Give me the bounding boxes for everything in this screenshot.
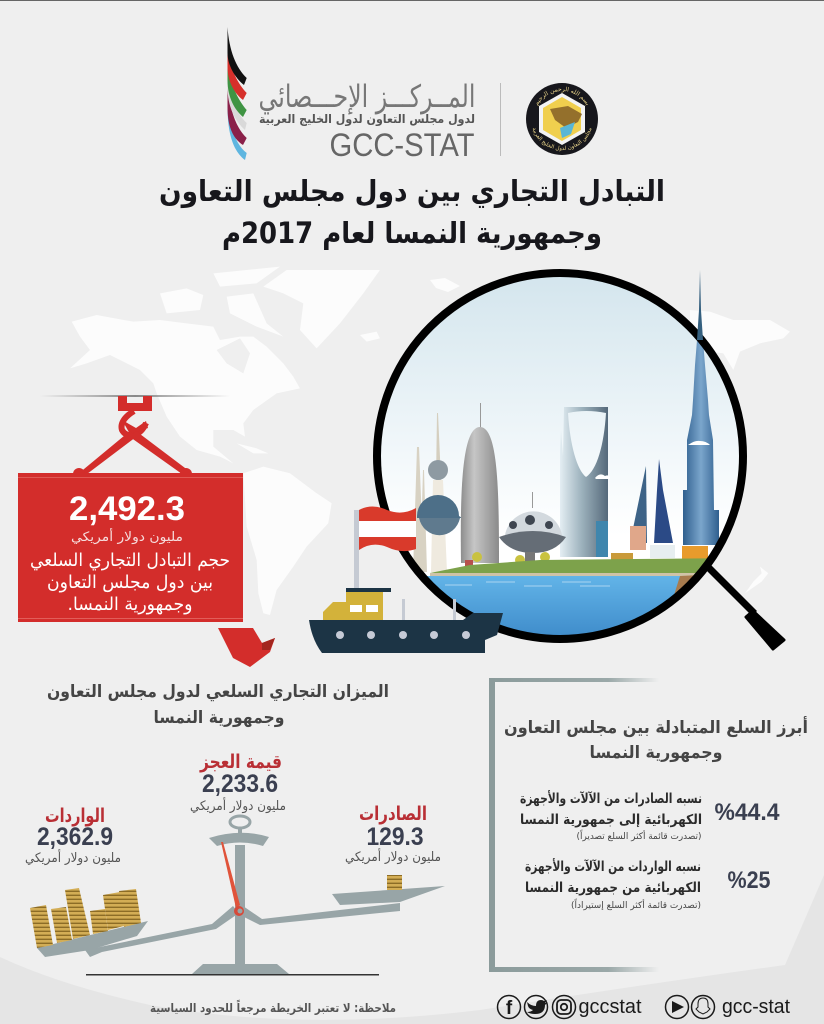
heading: trade balance: وجمهورية النمسا [154,708,284,728]
handle gcc-stat: gcc-stat [722,996,790,1018]
scale base [192,964,289,974]
panel bracket [489,678,659,972]
ship mast [402,599,405,621]
row: imports share: (تصدرت قائمة أكثر السلع إستيراداً) [571,898,701,911]
burj spire over ring [697,270,703,340]
sea [427,576,680,635]
tower: kingdom centre [560,407,608,557]
crane hook and cargo panel [18,395,243,622]
stat: exports: الصادرات [359,803,427,825]
icon: facebook [498,996,520,1019]
right pan [332,886,445,905]
waterfront [430,573,696,576]
handle gccstat: gccstat [578,996,642,1018]
scale beam right [238,903,400,925]
icon: snapchat [692,996,714,1018]
stat: deficit [190,751,286,814]
panel description: وجمهورية النمسا. [68,594,192,615]
row: exports share: %44.4 [714,799,780,826]
hanging ropes [78,431,193,474]
flag pole [354,510,359,588]
balance scale [30,816,445,976]
map: south america [243,467,332,615]
map: hudson bay [217,338,250,373]
flag [359,506,416,551]
row: exports share: الكهربائية إلى جمهورية النمسا [520,812,702,828]
panel heading [504,716,808,763]
wave highlights [445,582,610,586]
scale beam left [85,906,239,957]
row: imports share: %25 [728,867,770,894]
total value: 2,492.3 [69,490,185,528]
hook [118,396,152,435]
map: new zealand [745,567,768,593]
world map [70,267,790,615]
stat: deficit: 2,233.6 [202,770,278,798]
heading: trade balance: الميزان التجاري السلعي لدول مجلس التعاون [47,682,389,702]
map: caribbean [237,443,268,453]
panel heading: أبرز السلع المتبادلة بين مجلس التعاون [504,716,808,738]
panel description [30,550,230,615]
scale pivot [234,906,244,916]
ship windows [350,605,378,612]
social media handles [498,996,790,1019]
row: exports share [520,790,780,842]
heading: trade balance [47,682,389,728]
stat: imports: 2,362.9 [37,823,113,851]
map: greenland [263,270,380,348]
magnifier handle [703,562,784,649]
stat: imports: مليون دولار أمريكي [25,849,121,866]
stat: exports: 129.3 [366,823,424,851]
icon: facebook: f [506,998,513,1019]
scale pole [235,845,245,965]
row: imports share: نسبه الواردات من الآلآت والأجهزة [525,858,701,875]
panel description: حجم التبادل التجاري السلعي [30,550,230,571]
emblem [526,83,598,155]
unit: مليون دولار أمريكي [71,528,183,545]
logo gcc-stat wordmark: GCC-STAT [330,127,474,163]
left pan [37,921,148,957]
gcc map red [218,628,275,667]
magnifier ring [377,273,743,639]
scale ring [230,816,250,828]
map: arctic island north [213,267,280,287]
logo arabic subtitle: لدول مجلس التعاون لدول الخليج العربية [259,112,475,127]
stat: deficit: مليون دولار أمريكي [190,797,286,814]
map: arctic island west [160,288,203,313]
stat: exports [345,803,441,865]
row: imports share [525,858,770,911]
lens scene [381,277,739,635]
stat: imports: الواردات [45,805,105,827]
bottom swoosh [0,875,824,1024]
tower: kuwait spires [413,447,427,572]
icon: youtube [666,996,688,1018]
scale needle [221,842,240,908]
ship with flag [309,506,503,653]
ship hull [309,613,503,653]
portholes [336,631,470,639]
tower: burj khalifa [683,340,719,545]
map: arctic island east [227,293,283,337]
note: ملاحظة: لا تعتبر الخريطة مرجعاً للحدود السياسية [150,999,396,1016]
row: exports share: (تصدرت قائمة أكثر السلع تصديراً) [576,829,702,842]
emblem: بسم الله الرحمن الرحيم [536,86,588,106]
ship cabin [323,592,383,620]
panel description: بين دول مجلس التعاون [47,572,213,593]
emblem: مجلس التعاون لدول الخليج العربية [532,128,592,152]
map: europe islands [430,278,460,292]
title [159,174,665,250]
icon: instagram [552,996,576,1018]
map: iceland [360,332,380,342]
title line 1: التبادل التجاري بين دول مجلس التعاون [159,174,665,208]
logo ribbon [228,27,247,160]
logo: gcc-stat [228,27,598,163]
low buildings [465,545,708,568]
towers: bahrain trade centre [630,459,673,550]
panel heading: وجمهورية النمسا [590,743,722,763]
scale ground line [86,974,379,976]
dome building [499,492,566,553]
tower: kuwait towers [417,413,462,572]
red panel [18,473,243,622]
shore [674,575,694,594]
logo arabic name: المــركـــز الإحـــصائي [258,79,476,115]
coin stack right [387,875,402,890]
row: imports share: الكهربائية من جمهورية النمسا [525,880,701,896]
ground [430,558,707,573]
panel: top traded goods [489,678,808,972]
scale top arc [209,833,269,846]
magnifier [370,270,784,650]
coin stacks left [30,888,141,948]
map: north america [70,315,300,463]
title line 2: وجمهورية النمسا لعام 2017م [222,216,602,250]
small cloud [595,474,610,479]
stat: imports [25,805,121,866]
tower: doha tornado [461,403,499,563]
icon: twitter [524,996,548,1018]
map: eurasia [690,310,790,370]
row: exports share: نسبه الصادرات من الآلآت والأجهزة [520,790,702,807]
stat: deficit: قيمة العجز [199,751,282,773]
stat: exports: مليون دولار أمريكي [345,848,441,865]
